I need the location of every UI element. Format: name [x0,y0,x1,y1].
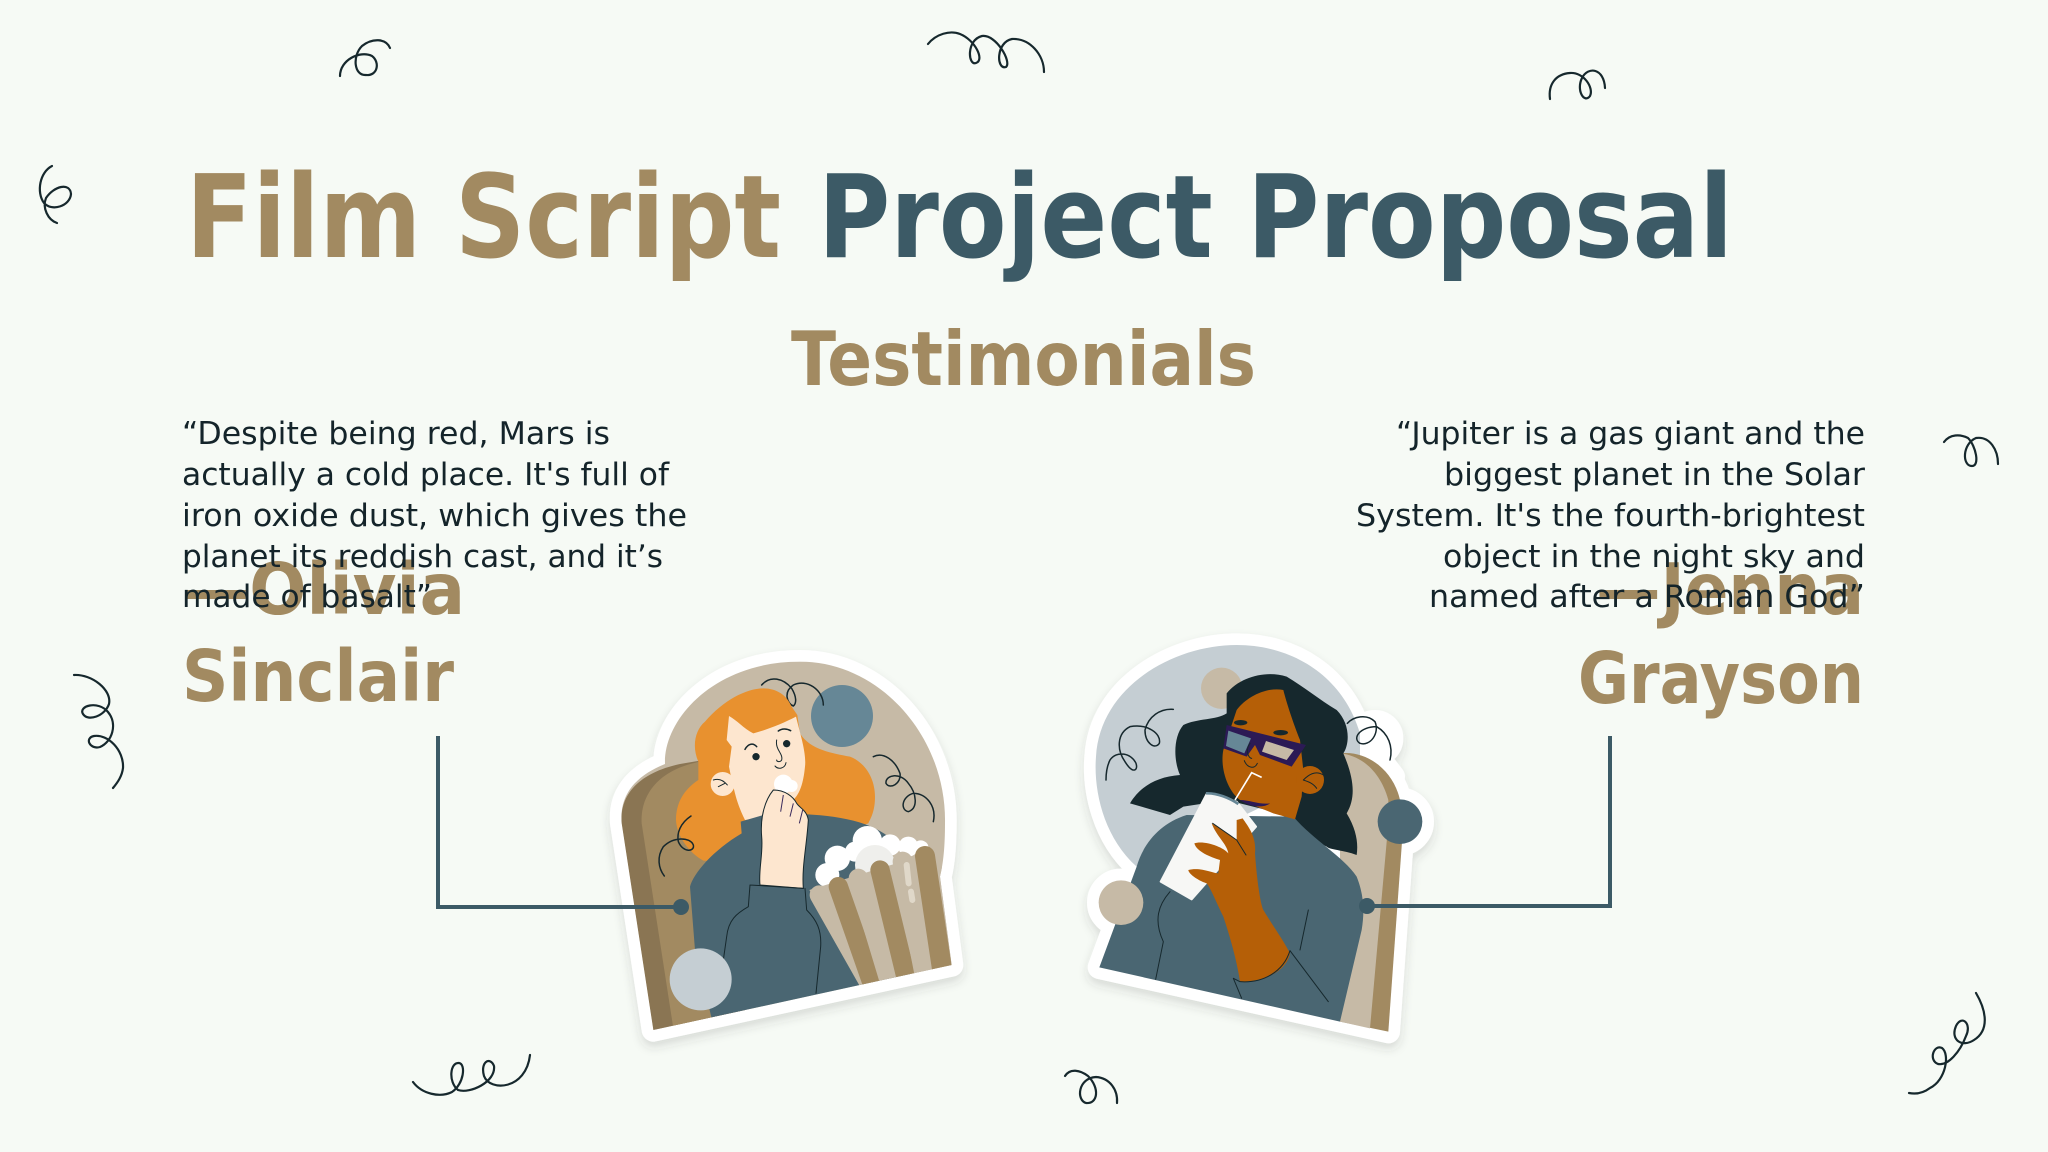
title [186,151,1733,285]
name: Jenna Grayson: —Jenna [1596,548,1864,631]
testimonial quote: Olivia: planet its reddish cast, and it’s [182,539,663,575]
testimonial quote: Jenna: object in the night sky and [1443,539,1865,575]
testimonial quote: Olivia: actually a cold place. It's full of [182,457,670,493]
testimonial quote: Olivia: iron oxide dust, which gives the [182,498,687,534]
testimonial quote: Jenna: named after a Roman God” [1429,579,1865,615]
testimonial quote: Olivia: made of basalt” [182,579,432,615]
testimonial quote: Jenna: biggest planet in the Solar [1444,457,1865,493]
title: Film Script [186,151,781,285]
connector: Jenna [1359,738,1610,914]
testimonial quote: Jenna [1356,416,1865,615]
sticker illustration: Jenna drinking soda [1096,645,1422,1032]
name: Jenna Grayson [1578,548,1864,720]
name: Jenna Grayson: Grayson [1578,637,1864,720]
testimonial quote: Olivia: “Despite being red, Mars is [182,416,610,452]
title: Project Proposal [818,151,1733,285]
name: Olivia Sinclair: —Olivia [182,548,465,631]
connector: Olivia [438,738,689,915]
sticker illustration: Olivia eating popcorn [613,653,963,1037]
testimonial quote: Jenna: “Jupiter is a gas giant and the [1396,416,1865,452]
name: Olivia Sinclair: Sinclair [182,635,454,718]
testimonial quote: Olivia [182,416,687,615]
subtitle: Testimonials: Testimonials [791,315,1256,403]
testimonial quote: Jenna: System. It's the fourth-brightest [1356,498,1865,534]
name: Olivia Sinclair [182,548,465,718]
